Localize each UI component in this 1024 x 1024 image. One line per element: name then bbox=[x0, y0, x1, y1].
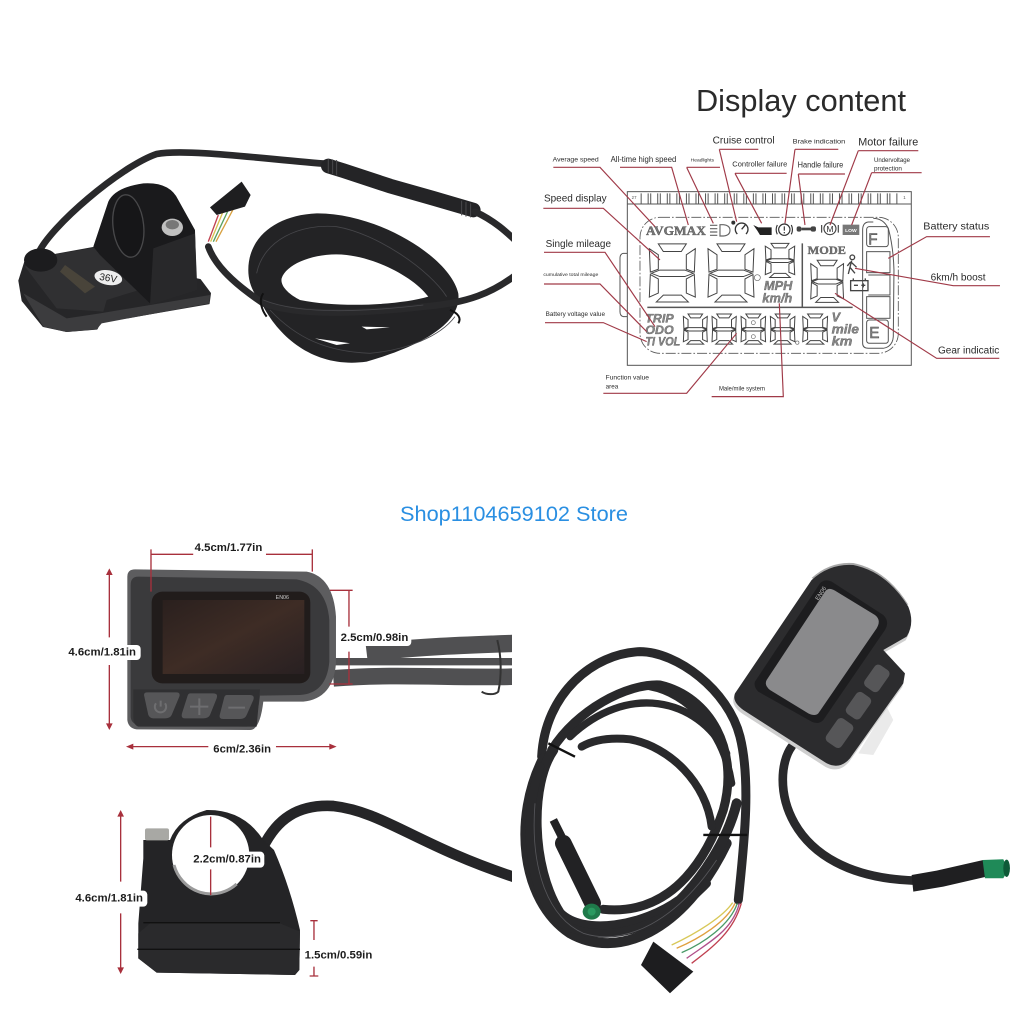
annotation labels: Headlights bbox=[691, 157, 714, 162]
annotation labels bbox=[543, 136, 999, 393]
mode labels TRIP ODO VOL: TI VOL bbox=[645, 335, 680, 349]
photo: clamp side with dimensions bbox=[73, 806, 515, 976]
base seam bbox=[137, 923, 300, 949]
icon: controller failure bbox=[753, 225, 772, 235]
clamp behind display bbox=[858, 707, 893, 755]
dimension 2.5: 2.5cm/0.98in bbox=[341, 632, 409, 644]
display top rim bbox=[812, 563, 908, 608]
button band bbox=[133, 689, 260, 727]
photo: display front with dimensions bbox=[67, 542, 515, 755]
dimension hole 2.2 bbox=[189, 817, 264, 895]
grey cables bbox=[333, 643, 515, 678]
annotation labels: Cruise control bbox=[713, 136, 775, 147]
connector: green-tip plug bbox=[553, 820, 601, 920]
clamp screw bbox=[145, 828, 169, 840]
connector: multi-pin plug bbox=[641, 942, 693, 993]
annotation labels: Handle failure bbox=[798, 161, 844, 170]
clamp tower bbox=[93, 183, 197, 303]
AVG MAX labels: AVGMAX bbox=[646, 224, 706, 238]
button: plus bbox=[844, 690, 873, 721]
segment counters bbox=[632, 195, 906, 200]
segment counters: 1 bbox=[903, 195, 906, 200]
model label: EN06 bbox=[815, 585, 828, 602]
dimension width 4.5: 4.5cm/1.77in bbox=[195, 542, 263, 554]
photo: display with coiled cable and connectors bbox=[525, 563, 1010, 993]
dimension width 6: 6cm/2.36in bbox=[213, 743, 271, 755]
plug bbox=[912, 860, 987, 892]
display cable bbox=[783, 747, 915, 881]
annotation labels: 6km/h boost bbox=[931, 273, 986, 284]
button: power bbox=[824, 716, 855, 750]
screen bezel bbox=[755, 580, 887, 723]
mode labels TRIP ODO VOL: TRIP bbox=[645, 312, 675, 326]
connector: inline plug bbox=[328, 159, 473, 217]
annotation labels: Average speed bbox=[553, 157, 599, 164]
base lower bbox=[138, 932, 300, 975]
annotation labels: cumulative total mileage bbox=[543, 272, 599, 278]
leader lines bbox=[543, 149, 1000, 397]
speed digit 2 bbox=[708, 244, 754, 302]
printed text patch bbox=[60, 265, 95, 293]
icon: walking assist bbox=[847, 255, 857, 274]
strain relief lump bbox=[24, 248, 57, 272]
cable coil bundle bbox=[208, 213, 520, 363]
button: plus bbox=[182, 693, 217, 718]
segment counters: 27 bbox=[632, 195, 637, 200]
dimension width 6 bbox=[126, 744, 336, 752]
coiled cable bbox=[525, 652, 746, 943]
speed digit 1 bbox=[649, 244, 695, 302]
clamp hole bbox=[172, 815, 249, 895]
body inner face bbox=[131, 577, 329, 727]
screen bbox=[152, 592, 310, 683]
icon: low battery bbox=[843, 225, 859, 235]
clamp screw bbox=[162, 219, 183, 236]
icon: brake bbox=[776, 224, 792, 235]
icon: motor failure: M bbox=[826, 224, 834, 234]
annotation labels: Single mileage bbox=[546, 239, 611, 250]
display body bbox=[734, 565, 911, 766]
base top plate bbox=[26, 248, 136, 312]
mode labels TRIP ODO VOL bbox=[645, 312, 680, 349]
clamp hole bbox=[112, 194, 145, 258]
dimension height 4.6: 4.6cm/1.81in bbox=[68, 647, 136, 659]
photo: handlebar controller with coiled cable bbox=[19, 152, 520, 363]
icon: handle failure bbox=[797, 226, 816, 232]
dimension height 4.6 bbox=[67, 568, 141, 730]
gear digit bbox=[811, 260, 844, 302]
icon: cruise control bbox=[732, 221, 748, 234]
icon: battery small bbox=[851, 278, 868, 291]
wires: coloured leads bbox=[208, 210, 234, 242]
decimal dots bbox=[751, 275, 799, 344]
device base bbox=[19, 247, 210, 331]
mode labels TRIP ODO VOL: ODO bbox=[645, 323, 674, 337]
screen inner bbox=[163, 600, 304, 674]
clamp body bbox=[138, 810, 300, 975]
cable ties bbox=[261, 293, 460, 323]
annotation labels: Undervoltage bbox=[874, 158, 911, 164]
annotation labels: Gear indicatic bbox=[938, 345, 999, 356]
model label: EN06 bbox=[276, 595, 289, 601]
unit labels MPH km/h: km/h bbox=[762, 291, 793, 305]
annotation labels: Male/mile system bbox=[719, 387, 765, 393]
display body rim bbox=[733, 569, 910, 769]
hole rim bbox=[174, 865, 237, 894]
unit labels V mile km: km bbox=[832, 335, 852, 349]
annotation labels: Battery voltage value bbox=[546, 312, 606, 318]
voltage sticker: 36V bbox=[98, 272, 118, 286]
unit labels V mile km: V bbox=[832, 311, 842, 325]
battery letters: E bbox=[869, 325, 880, 342]
button: minus bbox=[220, 695, 254, 719]
speed digit 3 bbox=[765, 243, 795, 277]
cable bbox=[263, 806, 515, 877]
panel: LCD diagram bbox=[543, 136, 1000, 397]
cable tie bbox=[482, 640, 501, 694]
cable: right end bbox=[476, 210, 512, 242]
annotation labels: Function value bbox=[606, 374, 649, 381]
annotation labels: Controller failure bbox=[732, 160, 787, 169]
dimension 1.5 bbox=[305, 921, 373, 976]
cable ties bbox=[548, 743, 747, 835]
unit labels V mile km bbox=[832, 311, 859, 349]
annotation labels: All-time high speed bbox=[611, 155, 676, 164]
MODE label: MODE bbox=[808, 243, 846, 257]
annotation labels: Motor failure bbox=[858, 136, 918, 148]
base lower edge bbox=[23, 293, 210, 332]
battery column bbox=[863, 218, 894, 348]
annotation labels: Speed display bbox=[544, 194, 607, 205]
annotation labels: protection bbox=[874, 167, 902, 173]
dimension height 4.6: 4.6cm/1.81in bbox=[75, 893, 143, 905]
function digits bbox=[683, 314, 828, 344]
store watermark: Shop1104659102 Store bbox=[400, 503, 628, 526]
button: minus bbox=[862, 663, 891, 694]
title: Display content bbox=[696, 83, 906, 118]
unit labels MPH km/h bbox=[762, 279, 793, 305]
battery letters: F bbox=[868, 231, 878, 248]
wires: coloured leads bbox=[672, 903, 741, 963]
unit labels V mile km: mile bbox=[832, 322, 859, 336]
battery letters bbox=[868, 231, 880, 342]
headlight icon bbox=[710, 225, 730, 236]
plug green tip bbox=[983, 859, 1010, 878]
button: power bbox=[144, 692, 180, 718]
dimension hole 2.2: 2.2cm/0.87in bbox=[193, 854, 261, 866]
dimension 1.5: 1.5cm/0.59in bbox=[305, 950, 373, 962]
dimension height 4.6 bbox=[73, 810, 147, 974]
screen bbox=[766, 589, 879, 715]
icon: motor failure bbox=[822, 223, 838, 235]
display body bbox=[127, 569, 336, 730]
unit labels MPH km/h: MPH bbox=[764, 279, 793, 293]
annotation labels: Battery status bbox=[923, 221, 989, 232]
voltage sticker bbox=[94, 270, 122, 286]
LCD frame bbox=[620, 192, 911, 365]
dimension 2.5 bbox=[329, 590, 411, 684]
icon: low battery: LOW bbox=[845, 228, 857, 234]
cable: from controller to connector bbox=[38, 152, 328, 253]
dimension width 4.5 bbox=[151, 542, 312, 592]
annotation labels: area bbox=[606, 384, 619, 391]
annotation labels: Brake indication bbox=[793, 138, 846, 145]
connector: small white-lead plug bbox=[210, 182, 251, 215]
